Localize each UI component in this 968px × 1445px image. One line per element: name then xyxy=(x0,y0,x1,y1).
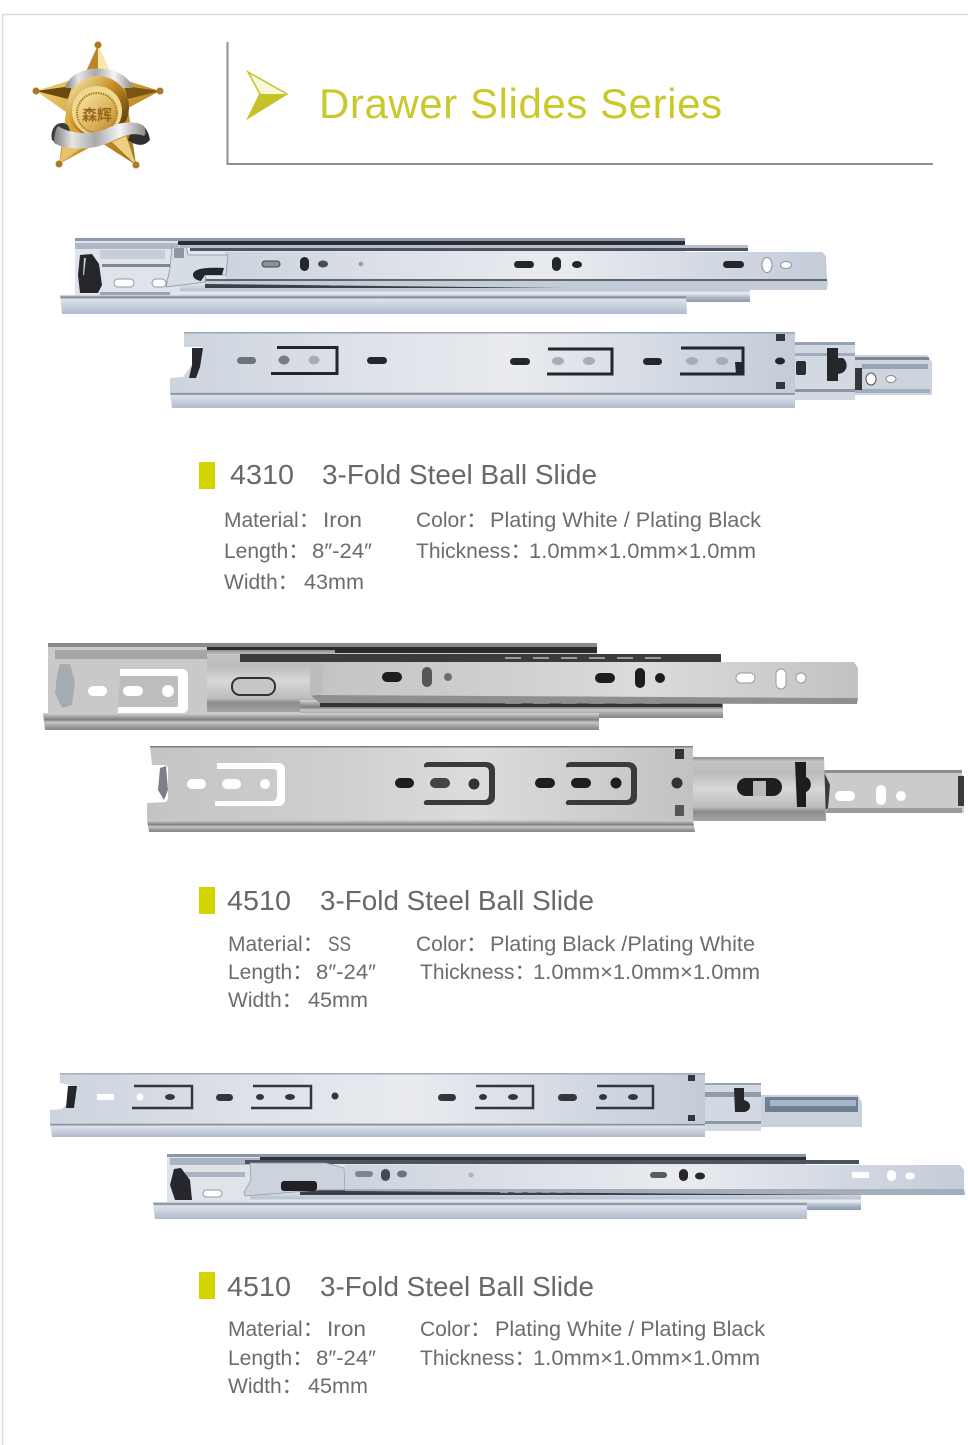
product photo: 4310 open slide xyxy=(60,238,828,314)
main body xyxy=(50,1073,705,1123)
middle rail xyxy=(180,245,748,248)
plate white holes xyxy=(187,779,206,789)
specs: 4510 SS: Length： xyxy=(228,961,313,984)
white fixing slots xyxy=(114,279,134,287)
slots and brackets xyxy=(237,334,785,389)
specs: 4510 SS: Thickness： xyxy=(420,961,536,984)
medal xyxy=(67,76,129,138)
specs: 4510 SS: 45mm xyxy=(308,989,368,1012)
white U cutout xyxy=(118,669,188,713)
specs: 4310: Width： xyxy=(224,571,299,594)
specs: 4510 iron: Material： xyxy=(228,1318,324,1341)
plate white holes xyxy=(88,686,107,696)
marker xyxy=(199,1272,215,1299)
specs: 4510 iron: Iron xyxy=(327,1318,366,1341)
product photo: 4310 closed slide xyxy=(170,332,932,408)
black stopper xyxy=(170,1168,192,1200)
title: Drawer Slides Series xyxy=(319,80,722,127)
specs: 4310: 8″-24″ xyxy=(312,540,373,563)
heading: 4310: 3-Fold Steel Ball Slide xyxy=(322,459,597,490)
specs: 4510 iron: Thickness： xyxy=(420,1347,536,1370)
specs: 4510 SS: Plating Black /Plating White xyxy=(490,933,755,956)
product photo: 4510 iron open slide xyxy=(153,1154,965,1219)
white slot xyxy=(203,1190,222,1197)
specs: 4510 SS xyxy=(228,933,760,1012)
specs: 4510 iron: Color： xyxy=(420,1318,491,1341)
marker xyxy=(199,462,215,489)
specs: 4310: Iron xyxy=(323,509,362,532)
heading: 4310: 4310 xyxy=(230,459,294,490)
ball bearing dashes xyxy=(505,658,665,703)
inner stage xyxy=(824,770,964,813)
outer channel back xyxy=(75,238,685,296)
rail stages xyxy=(855,355,932,395)
middle rail xyxy=(240,654,721,662)
main body xyxy=(147,746,693,820)
inner stage xyxy=(761,1095,862,1127)
specs: 4510 iron: 45mm xyxy=(308,1375,368,1398)
middle rail xyxy=(245,1160,859,1164)
inner rail holes xyxy=(355,1169,705,1181)
ribbon xyxy=(51,122,150,149)
specs: 4310: 43mm xyxy=(304,571,364,594)
middle stage xyxy=(705,1083,761,1131)
product photo: 4510 SS open slide xyxy=(43,643,858,730)
lower lip xyxy=(170,392,795,408)
specs: 4510 SS: Material： xyxy=(228,933,324,956)
heading: 4510 iron xyxy=(199,1271,594,1302)
specs: 4310: Length： xyxy=(224,540,309,563)
specs: 4510 SS: 1.0mm×1.0mm×1.0mm xyxy=(533,961,760,984)
outer channel back xyxy=(48,643,597,715)
ball bearing dashes xyxy=(500,1191,700,1193)
logo: gold star badge xyxy=(32,42,164,168)
heading: 4510 iron: 4510 xyxy=(227,1271,291,1302)
black stopper xyxy=(827,348,847,381)
heading: 4510 SS: 3-Fold Steel Ball Slide xyxy=(320,885,594,916)
heading: 4510 iron: 3-Fold Steel Ball Slide xyxy=(320,1271,594,1302)
specs: 4310 xyxy=(224,509,762,594)
specs: 4510 SS: Width： xyxy=(228,989,303,1012)
middle section xyxy=(207,650,335,712)
inner rail holes xyxy=(866,373,876,385)
specs: 4310: Thickness： xyxy=(416,540,532,563)
outer front lip xyxy=(43,713,599,730)
heading: 4310 xyxy=(199,459,597,490)
medal characters: 森辉 xyxy=(82,104,112,125)
middle stage xyxy=(693,757,826,821)
dark slots and brackets xyxy=(395,749,684,816)
header frame line xyxy=(228,42,933,164)
grey stopper xyxy=(55,664,75,708)
specs: 4510 SS: SS xyxy=(328,933,351,956)
inner rail face xyxy=(225,252,827,280)
inner rail holes xyxy=(262,257,744,271)
inner rail head xyxy=(166,247,228,287)
specs: 4510 iron: Plating White / Plating Black xyxy=(495,1318,766,1341)
inner rail face xyxy=(345,1165,964,1190)
holes and brackets xyxy=(97,1075,695,1121)
product photo: 4510 iron closed slide xyxy=(50,1073,862,1137)
main body xyxy=(170,332,795,392)
star arms xyxy=(36,45,160,165)
white U cutout xyxy=(215,763,285,806)
specs: 4510 SS: Color： xyxy=(416,933,487,956)
specs: 4510 SS: 8″-24″ xyxy=(316,961,377,984)
specs: 4510 iron: 8″-24″ xyxy=(316,1347,377,1370)
white inner holes xyxy=(835,791,855,801)
marker xyxy=(199,887,215,914)
rail head xyxy=(244,1163,345,1196)
specs: 4310: Color： xyxy=(416,509,487,532)
outer front lip xyxy=(153,1202,807,1219)
black stopper xyxy=(734,1088,750,1112)
outer channel back xyxy=(167,1154,806,1204)
icon: arrowhead xyxy=(248,72,287,118)
product photo: 4510 SS closed slide xyxy=(147,746,964,832)
heading: 4510 SS xyxy=(199,885,594,916)
inner rail holes xyxy=(382,667,665,688)
specs: 4310: Material： xyxy=(224,509,320,532)
specs: 4510 iron: 1.0mm×1.0mm×1.0mm xyxy=(533,1347,760,1370)
specs: 4510 iron xyxy=(228,1318,766,1398)
specs: 4510 iron: Length： xyxy=(228,1347,313,1370)
specs: 4310: Plating White / Plating Black xyxy=(490,509,762,532)
inner rail face xyxy=(320,662,858,698)
specs: 4310: 1.0mm×1.0mm×1.0mm xyxy=(529,540,756,563)
star tips xyxy=(32,42,164,168)
heading: 4510 SS: 4510 xyxy=(227,885,291,916)
black stopper xyxy=(78,254,102,293)
silver arc xyxy=(65,68,133,88)
outer front lip xyxy=(60,295,687,314)
ball bearing dashes xyxy=(330,284,570,286)
black stopper xyxy=(795,762,811,807)
specs: 4510 iron: Width： xyxy=(228,1375,303,1398)
